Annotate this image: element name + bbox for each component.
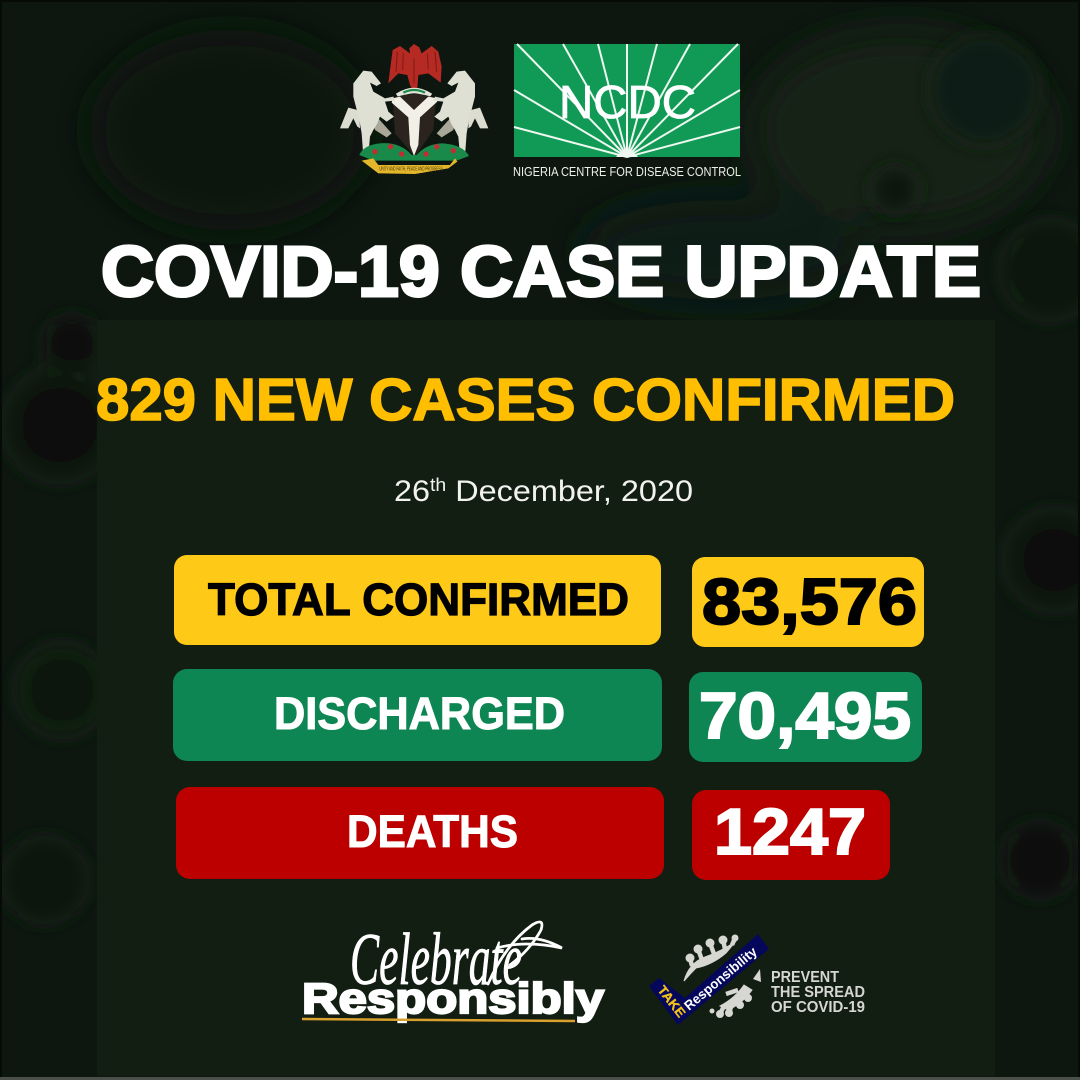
row: deaths label: DEATHS: [347, 806, 518, 857]
eagle: [388, 44, 442, 88]
bold word: Responsibly: [302, 975, 604, 1023]
right horse: [433, 71, 488, 156]
row: total confirmed label: [174, 555, 661, 645]
row: total confirmed value: 83,576: [702, 565, 917, 638]
panel: main dark panel: [97, 320, 995, 1076]
row: deaths label: [176, 787, 664, 879]
row: deaths value: 1247: [714, 795, 866, 868]
wreath: [397, 90, 431, 96]
prevent text: PREVENT: [771, 969, 839, 986]
green square with rays: [514, 44, 740, 157]
logo: NCDC: [513, 44, 741, 179]
logo: Celebrate Responsibly: [302, 919, 604, 1023]
row: total confirmed label: TOTAL CONFIRMED: [208, 574, 629, 625]
ribbon: [362, 158, 457, 174]
gold underline: [302, 1019, 575, 1021]
green base: [359, 143, 469, 161]
row: discharged label: DISCHARGED: [274, 688, 565, 739]
icon: Nigerian coat of arms: [340, 44, 488, 174]
logo: take responsibility: [649, 934, 869, 1025]
shield: [393, 94, 436, 157]
row: deaths value: [692, 790, 890, 880]
row: discharged value: 70,495: [699, 679, 911, 752]
date: th: [430, 475, 446, 495]
NCDC letters: NCDC: [559, 76, 696, 128]
row: discharged value: [689, 672, 922, 762]
prevent text: OF COVID-19: [771, 999, 865, 1016]
logo caption: NIGERIA CENTRE FOR DISEASE CONTROL: [513, 164, 741, 179]
left horse: [340, 71, 395, 156]
take: TAKE: [655, 983, 689, 1020]
row: discharged label: [173, 669, 662, 761]
title: COVID-19 CASE UPDATE: [101, 233, 981, 312]
date: December, 2020: [446, 475, 693, 508]
script word: Celebrate: [350, 919, 522, 1001]
prevent text: THE SPREAD: [771, 984, 865, 1001]
responsibility: Responsibility: [681, 944, 760, 1013]
virus bottom half: [710, 969, 761, 1018]
virus top half: [684, 934, 738, 981]
date: 26: [394, 475, 427, 508]
Y pall: [392, 97, 437, 156]
check mark: [649, 934, 769, 1025]
row: total confirmed value: [692, 557, 924, 647]
heading: new cases: 829 NEW CASES CONFIRMED: [96, 367, 955, 433]
script swash: [488, 922, 562, 984]
motto: UNITY AND FAITH, PEACE AND PROGRESS: [379, 166, 443, 172]
